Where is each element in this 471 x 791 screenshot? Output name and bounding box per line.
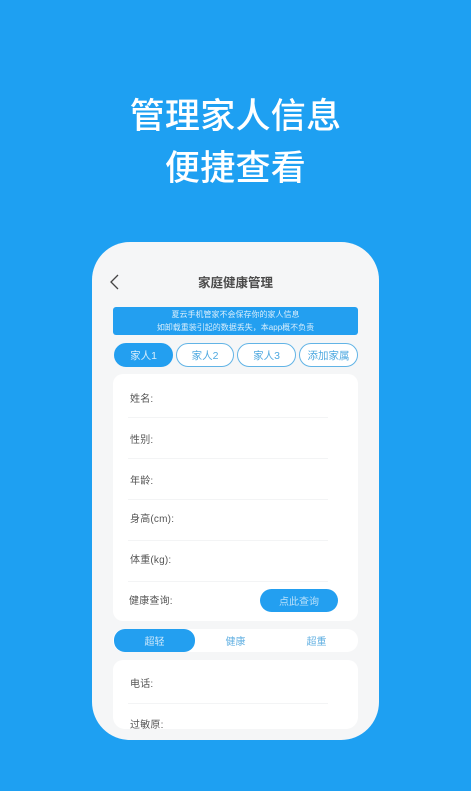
screen heading: 家庭健康管理 [198,276,273,290]
phone mockup [92,242,379,740]
family tab: 家人3 [237,343,296,367]
notice banner: 夏云手机管家不会保存你的家人信息 [172,310,300,319]
title: 便捷查看 [165,148,306,188]
notice banner: 如卸载重装引起的数据丢失，本app概不负责 [157,322,314,332]
family tab: 家人2 [176,343,234,367]
family tab: 家人2: 家人2 [192,350,218,362]
family tab: 家人1: 家人1 [130,350,157,362]
field: weight: 体重(kg): [130,555,171,566]
field: name: 姓名: [130,394,153,405]
family tab: 家人1 [114,343,173,367]
field: gender: 性别: [130,435,153,446]
status: underweight: 超轻 [144,637,164,648]
field: height: 身高(cm): [130,514,174,525]
family tab: 家人3: 家人3 [253,350,280,362]
status: underweight [114,629,195,652]
field: age: 年龄: [130,476,153,487]
form card: contact details [113,660,358,729]
icon: back arrow [110,274,118,290]
form card: personal details [113,374,358,621]
button: query: 点此查询 [279,597,319,608]
family tab: add member: 添加家属 [308,350,350,362]
family tab: add member [299,343,358,367]
field: phone: 电话: [130,679,153,690]
notice banner [113,307,358,335]
title [130,96,341,188]
weight status selector [113,629,358,652]
title: 管理家人信息 [130,96,341,136]
button: query [260,589,338,612]
status: overweight: 超重 [306,637,326,648]
field: health query: 健康查询: [129,596,173,607]
status: healthy: 健康 [226,637,246,648]
